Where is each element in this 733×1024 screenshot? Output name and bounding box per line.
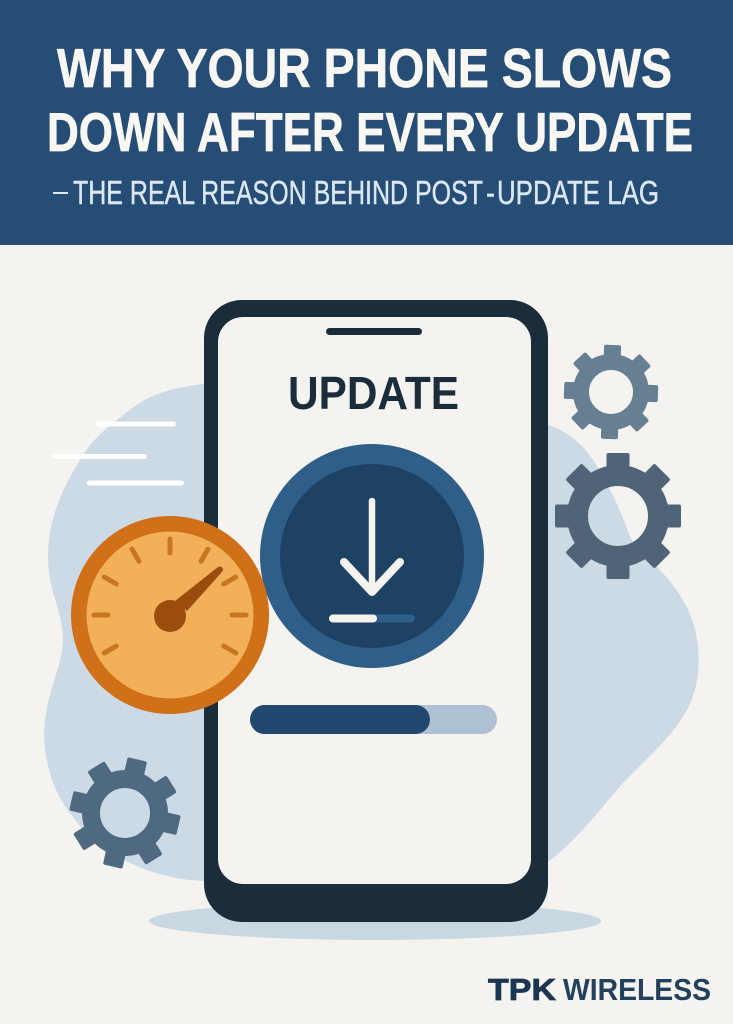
brand logo: WIRELESS [563,972,711,1007]
download icon [260,444,484,668]
phone shadow [149,902,601,940]
speedometer gauge [71,516,269,714]
progress bar [250,705,497,734]
brand logo [488,972,711,1007]
gear: lower left [69,757,181,869]
gauge ticks [94,539,246,653]
subtitle: UPDATE LAG [497,174,659,211]
subtitle: - [486,174,495,211]
speaker [326,328,422,335]
phone [204,300,548,922]
phone screen [218,317,531,884]
brand logo: TPK [488,972,557,1007]
gear: middle right [555,453,681,579]
background blob [44,384,699,881]
down arrow [344,501,400,592]
subtitle: THE REAL REASON BEHIND POST [73,174,483,211]
icon progress [329,614,415,622]
phone body [204,300,548,922]
speed lines [52,422,184,486]
gauge needle [154,566,223,632]
title [47,37,693,163]
header banner [0,0,733,245]
update label: UPDATE [288,367,459,419]
gear: top right [564,345,658,439]
